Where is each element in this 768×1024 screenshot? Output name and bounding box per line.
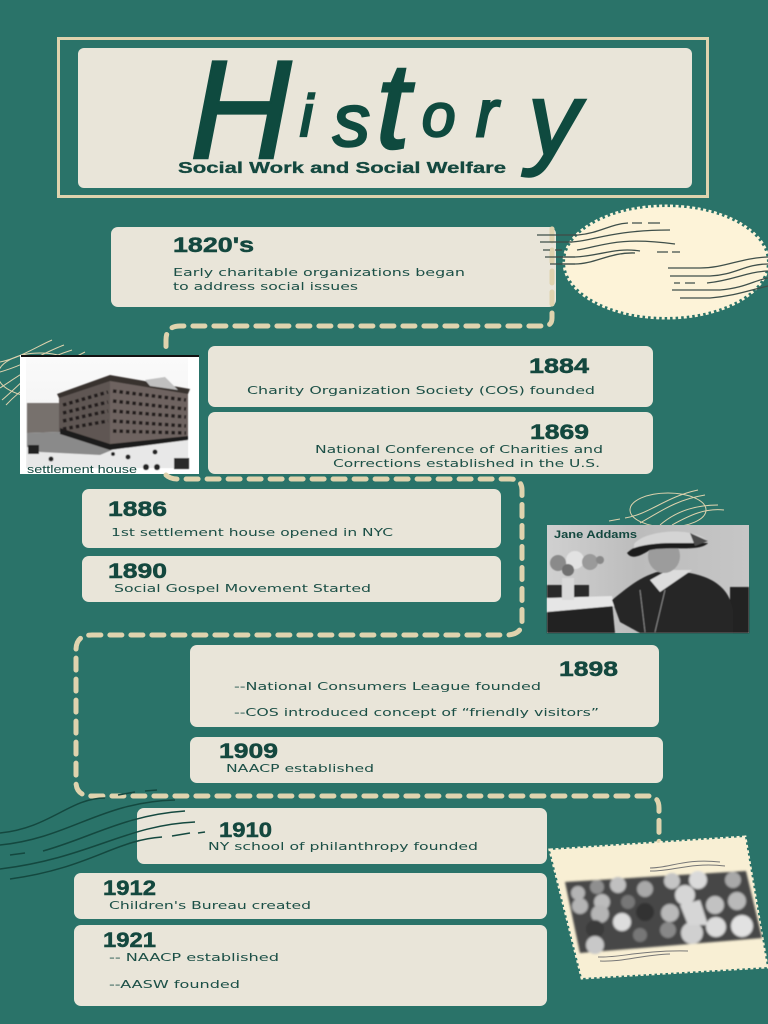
title: s	[333, 79, 370, 162]
panel: 1910	[137, 808, 547, 864]
title: r	[476, 76, 501, 150]
panel: 1820's	[111, 227, 556, 307]
postmark lines over 1820's panel	[537, 235, 575, 264]
year: 1890	[108, 560, 167, 583]
panel: 1921	[74, 925, 547, 1006]
panel: 1909	[190, 737, 663, 783]
description: --AASW founded	[109, 978, 240, 991]
panel: 1869	[208, 412, 653, 474]
year: 1910	[219, 819, 272, 842]
title: t	[376, 38, 415, 174]
title background	[78, 48, 692, 188]
year: 1909	[219, 740, 278, 763]
description: --COS introduced concept of “friendly visitors”	[234, 706, 599, 719]
decorative postmark: Jane Addams	[609, 490, 724, 527]
title: y	[522, 62, 586, 178]
description: Early charitable organizations began	[173, 266, 465, 279]
building	[27, 375, 190, 470]
description: National Conference of Charities and	[315, 443, 603, 456]
year: 1869	[530, 421, 589, 444]
description: NAACP established	[226, 762, 374, 775]
year: 1820's	[173, 234, 254, 257]
subtitle: Social Work and Social Welfare	[178, 160, 506, 177]
year: 1921	[103, 929, 156, 952]
description: Corrections established in the U.S.	[333, 457, 600, 470]
postmark stamp: round	[537, 207, 768, 317]
description: to address social issues	[173, 280, 358, 293]
photo: settlement house	[20, 355, 199, 476]
year: 1884	[529, 355, 589, 378]
title frame	[58, 38, 708, 196]
photo: Jane Addams	[547, 525, 749, 633]
description: Children's Bureau created	[109, 899, 311, 912]
year: 1886	[108, 498, 167, 521]
decorative pale lines: settlement	[0, 340, 85, 405]
connector: dashed path top	[166, 229, 552, 352]
description: NY school of philanthropy founded	[208, 840, 478, 853]
title: i	[300, 84, 315, 149]
photo stamp: children	[550, 837, 767, 978]
caption: Jane Addams	[554, 529, 637, 541]
crowd photo	[565, 871, 762, 954]
description: Charity Organization Society (COS) founded	[247, 384, 595, 397]
year: 1898	[559, 658, 618, 681]
year: 1912	[103, 877, 156, 900]
postmark lines: bottom left	[0, 790, 205, 879]
panel: 1912	[74, 873, 547, 919]
panel: 1886	[82, 489, 501, 548]
panel: 1898	[190, 645, 659, 727]
description: -- NAACP established	[109, 951, 279, 964]
panel: 1884	[208, 346, 653, 407]
title panel	[58, 31, 708, 196]
description: --National Consumers League founded	[234, 680, 541, 693]
panel: 1890	[82, 556, 501, 602]
description: Social Gospel Movement Started	[114, 582, 371, 595]
caption: settlement house	[27, 464, 137, 476]
title: H	[190, 31, 292, 188]
connector: dashed path middle	[76, 475, 659, 845]
title: o	[422, 82, 455, 149]
connector overlay on 1820's panel	[550, 229, 554, 307]
description: 1st settlement house opened in NYC	[111, 526, 393, 539]
